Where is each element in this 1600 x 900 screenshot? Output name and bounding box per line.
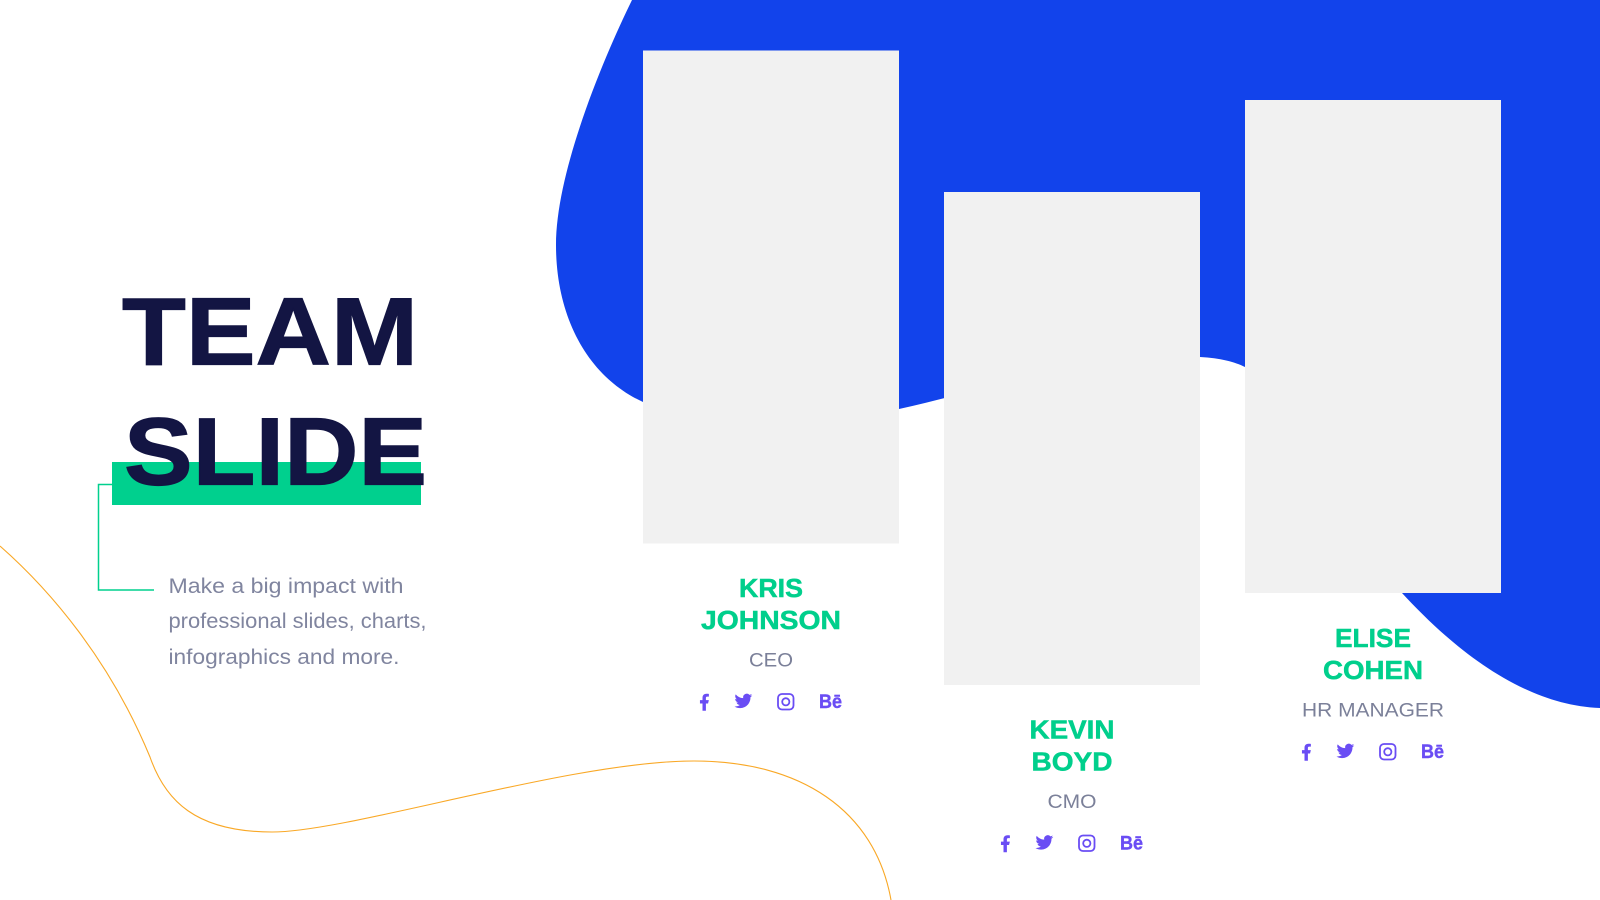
- description text: infographics and more.: [168, 645, 400, 669]
- name: KEVIN: [1030, 714, 1114, 744]
- name: [1323, 623, 1423, 685]
- card: Elise Cohen: [1245, 100, 1501, 763]
- name: BOYD: [1032, 746, 1112, 776]
- icon: behance: Bē: [1120, 834, 1143, 854]
- icon: twitter: [1336, 744, 1354, 758]
- card: Kevin Boyd: [944, 192, 1200, 854]
- name: KRIS: [739, 573, 803, 603]
- icon: instagram: [1079, 836, 1094, 851]
- icon: twitter: [1036, 835, 1053, 850]
- social icons: [1302, 742, 1444, 763]
- photo placeholder: [944, 192, 1200, 685]
- title: [122, 278, 427, 506]
- photo placeholder: [643, 50, 899, 544]
- title highlight bar: [112, 462, 421, 505]
- icon: facebook: [1302, 744, 1311, 761]
- title: TEAM: [122, 278, 418, 386]
- description text: [168, 574, 426, 669]
- role: HR MANAGER: [1302, 700, 1444, 722]
- description text: professional slides, charts,: [168, 609, 426, 633]
- orange decorative curve: [0, 546, 891, 900]
- icon: behance: Bē: [819, 692, 842, 713]
- name: [701, 573, 841, 635]
- icon: behance: Bē: [1421, 742, 1444, 763]
- name: ELISE: [1335, 623, 1411, 653]
- social icons: [700, 692, 842, 713]
- role: CEO: [749, 650, 793, 672]
- name: [1030, 714, 1114, 776]
- blue background blob: [556, 0, 1600, 708]
- social icons: [1001, 834, 1143, 854]
- green connector line: [98, 484, 154, 590]
- icon: twitter: [734, 694, 752, 708]
- photo placeholder: [1245, 100, 1501, 593]
- name: COHEN: [1323, 655, 1423, 685]
- icon: instagram: [778, 694, 794, 710]
- description text: Make a big impact with: [168, 574, 404, 598]
- icon: facebook: [1001, 835, 1010, 852]
- icon: instagram: [1380, 744, 1396, 760]
- name: JOHNSON: [701, 605, 841, 635]
- icon: facebook: [700, 694, 709, 711]
- card: Kris Johnson: [643, 50, 899, 713]
- role: CMO: [1048, 791, 1096, 813]
- title: SLIDE: [124, 398, 427, 506]
